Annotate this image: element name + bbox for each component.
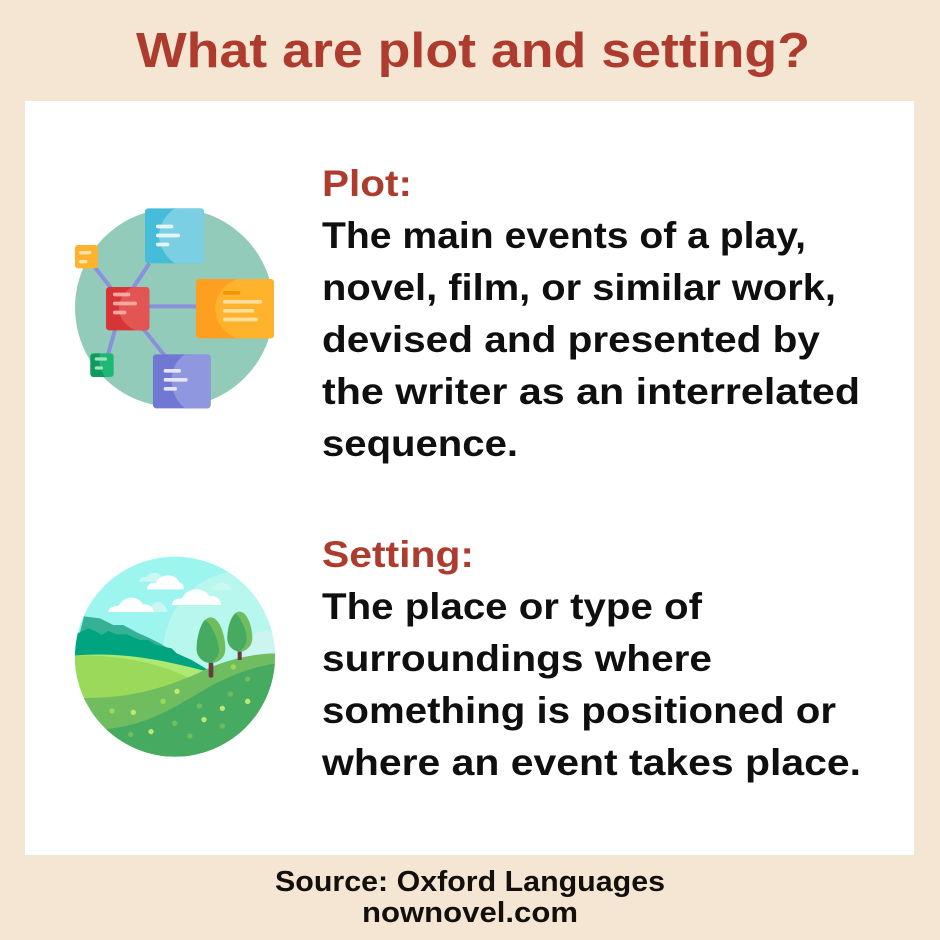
source credit: nownovel.com	[362, 897, 578, 929]
heading: Plot: Plot:	[322, 163, 412, 204]
source credit	[275, 866, 665, 929]
setting definition text: The place or type of	[322, 586, 703, 627]
plot definition text: the writer as an interrelated	[322, 371, 860, 412]
setting definition text	[321, 586, 861, 783]
title: What are plot and setting?	[136, 24, 810, 78]
setting definition text: surroundings where	[322, 638, 712, 679]
plot definition text: novel, film, or similar work,	[322, 267, 836, 308]
plot definition text	[322, 215, 860, 464]
source credit: Source: Oxford Languages	[275, 866, 665, 898]
icon: landscape setting	[74, 556, 275, 757]
icon: plot network	[75, 208, 274, 408]
white content panel	[25, 101, 914, 855]
plot definition text: sequence.	[322, 423, 518, 464]
heading: Setting: Setting:	[322, 534, 474, 575]
setting definition text: something is positioned or	[322, 690, 836, 731]
plot definition text: The main events of a play,	[322, 215, 806, 256]
plot definition text: devised and presented by	[322, 319, 820, 360]
setting definition text: where an event takes place.	[321, 742, 861, 783]
